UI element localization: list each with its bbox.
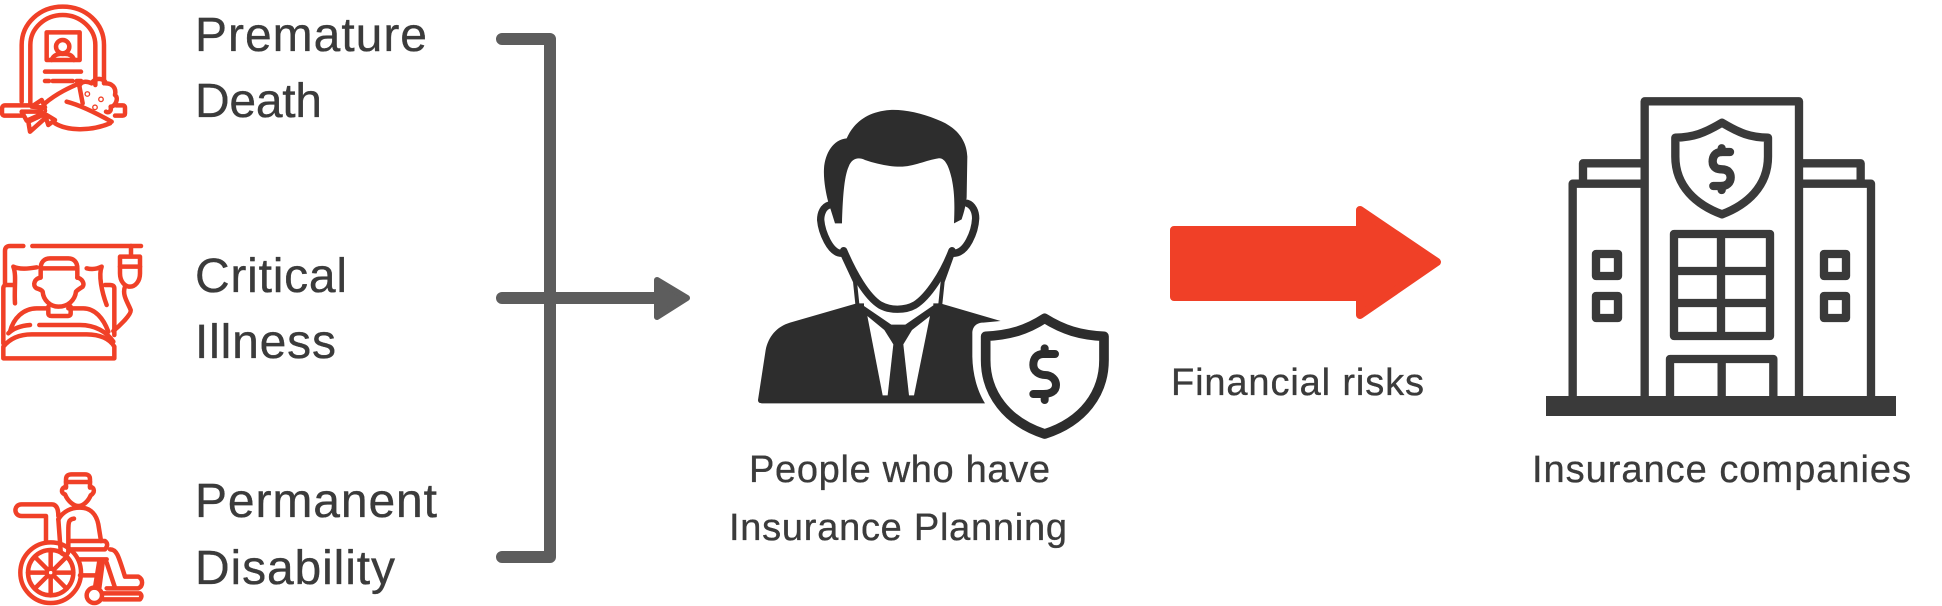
- label: Financial risks: Financial risks: [1171, 362, 1424, 404]
- label: Insurance companies: Insurance companies: [1532, 449, 1911, 491]
- label: Critical Illness: Illness: [195, 316, 336, 369]
- label: Permanent Disability: [195, 475, 437, 595]
- label: Premature Death: Premature: [195, 9, 427, 62]
- bracket joining the three risks: [502, 39, 550, 557]
- icon: gravestone with bouquet: [2, 7, 125, 132]
- icon: patient in hospital bed with IV: [3, 246, 141, 358]
- label: Critical Illness: Critical: [195, 250, 347, 303]
- label: Critical Illness: [195, 250, 347, 369]
- label: Permanent Disability: Permanent: [195, 475, 437, 528]
- label: Premature Death: Death: [195, 75, 322, 128]
- label: Premature Death: [195, 9, 427, 128]
- label: People who have Insurance Planning: People who have: [749, 449, 1050, 491]
- arrow: risks to people: [502, 280, 687, 317]
- icon: insurance company building: [1546, 101, 1896, 416]
- arrow: financial risks transfer: [1174, 210, 1437, 315]
- label: People who have Insurance Planning: Insurance Planning: [729, 507, 1067, 549]
- icon: person with dollar shield: [758, 110, 1104, 434]
- icon: person in wheelchair: [15, 474, 142, 603]
- label: People who have Insurance Planning: [729, 449, 1067, 549]
- label: Permanent Disability: Disability: [195, 542, 395, 595]
